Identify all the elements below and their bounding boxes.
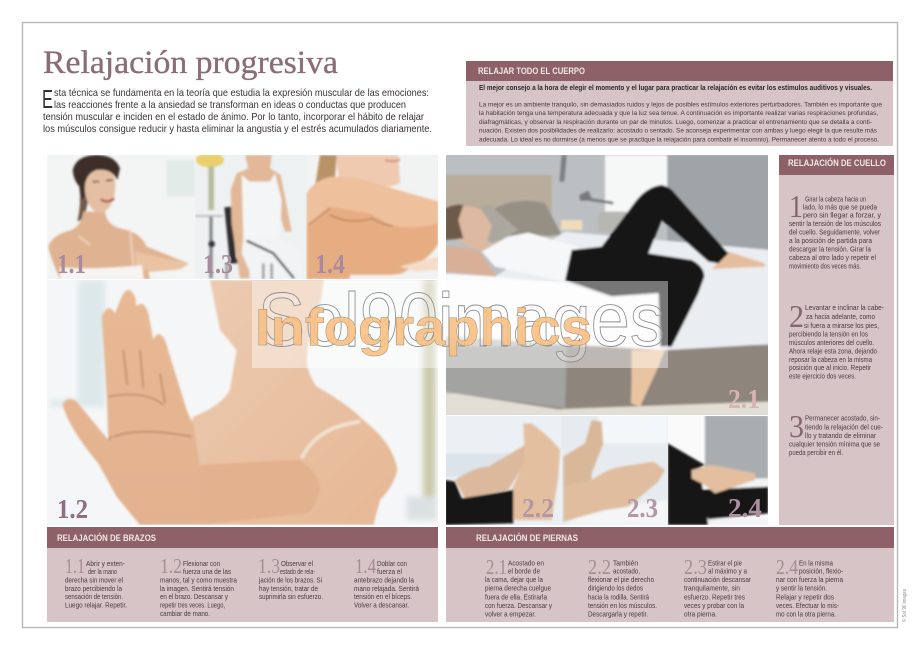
leg step 2.2 [588,555,657,618]
neck step 1: Girar la cabeza hacia un [805,194,866,204]
leg step 2.1: pierna derecha cuelgue [485,584,551,592]
arm step 1.1: 1.1 [65,554,85,578]
watermark: Sol90images [258,278,665,363]
arm step 1.4: Volver a descansar. [354,600,409,610]
leg step 2.3: esfuerzo. Repetir tres [684,592,745,602]
neck step 1: 1 [789,188,803,224]
leg step 2.1: 2.1 [486,555,507,579]
panel body text: la habitación tenga una temperatura adecuada y que la luz sea tenue. A continuación es importante realizar varias respiraciones profundas, [479,110,878,117]
arm step 1.4: tensión en el bíceps. [354,592,412,601]
leg step 2.4: Relajar y repetir dos [776,592,834,602]
photo number labels: 2.4 [728,493,762,523]
leg step 2.1: fuera de ella. Estirarla [485,592,547,602]
neck step 2: 2 [789,298,804,334]
neck step 2: músculos anteriores del cuello. [789,338,874,347]
neck step 1 [789,188,881,270]
neck step 3: 3 [789,408,804,444]
photo 2.3: relaxed foot [562,415,668,525]
arm step 1.1: brazo percibiendo la [65,584,122,593]
leg step 2.1: el borde de [508,566,540,576]
photo 2.2: flexed foot [445,416,562,525]
photo 2.4: foot and black legs [668,415,768,525]
leg step 2.2: dirigiendo los dedos [588,584,643,592]
leg step 2.3: otra pierna. [684,610,717,618]
neck step 2 [789,298,885,380]
leg step 2.2: flexionar el pie derecho [588,575,654,584]
photo 1.2: raised open hand [47,280,438,530]
leg step 2.2: También [613,558,638,568]
photo 2.1: woman lying on bed [445,155,770,420]
arm step 1.1 [65,554,127,610]
leg step 2.1: con fuerza. Descansar y [485,601,552,610]
leg step 2.4: posición, flexio- [799,566,844,576]
arm step 1.2: 1.2 [160,554,182,578]
panel: relajación de cuello [779,155,894,525]
intro text block: sta técnica se fundamenta en la teoría que estudia la expresión muscular de las emociones: [54,88,429,99]
leg step 2.4: veces. Efectuar lo mis- [776,601,840,610]
neck step 1: descargar la tensión. Girar la [789,244,871,254]
heading: relajar todo el cuerpo: RELAJAR TODO EL CUERPO [478,66,585,76]
intro text block [42,84,432,135]
arm step 1.1: Abrir y exten- [86,559,126,568]
arm step 1.2: la imagen. Sentirá tensión [160,584,234,593]
photo credit: © Sol 90 Images [901,589,908,622]
arm step 1.3: estado de rela- [280,567,315,576]
leg step 2.2: tensión en los músculos. [588,601,657,610]
arm step 1.3: suprimirla sin esfuerzo. [259,592,323,601]
arm step 1.2: cambiar de mano. [160,609,210,618]
leg step 2.2: 2.2 [588,555,611,579]
neck step 2: Levantar e inclinar la cabe- [805,303,885,312]
heading: relajación de piernas: RELAJACIÓN DE PIERNAS [476,532,578,543]
arm step 1.2: repetir tres veces. Luego, [160,600,225,610]
panel lead sentence: El mejor consejo a la hora de elegir el momento y el lugar para practicar la relajación es evitar los estímulos auditivos y visuales. [479,85,872,92]
leg step 2.3: al máximo y a [708,566,747,576]
leg step 2.3: 2.3 [684,555,707,579]
neck step 3: llo y tratando de eliminar [805,431,877,440]
leg step 2.4: En la misma [799,558,833,568]
arm step 1.2: manos, tal y como muestra [160,576,237,584]
photo number labels: 1.2 [57,494,88,524]
panel body text: diafragmáticas, y observar la respiración durante un par de minutos. Luego, comenzar a practicar el entrenamiento que se detalla a conti- [479,119,872,126]
intro text block: las reacciones frente a la ansiedad se transforman en ideas o conductas que producen [54,100,406,111]
arm step 1.4: mano relajada. Sentirá [354,584,419,593]
photo 1.3: seated woman [195,153,306,279]
photo number labels [57,249,762,524]
panel body text: La mejor es un ambiente tranquilo, sin demasiados ruidos y lejos de posibles estímulos exteriores perturbadores. También es importante que [479,102,882,108]
neck step 1: pero sin llegar a forzar, y [803,210,881,220]
neck step 3: pueda percibir en él. [789,448,843,457]
heading: relajación de cuello: RELAJACIÓN DE CUELLO [788,157,886,168]
leg step 2.3: Estirar el pie [708,558,742,568]
arm step 1.1: Luego relajar. Repetir. [65,600,127,610]
arm step 1.2 [160,554,237,618]
intro text block: los músculos consigue reducir y hasta eliminar la angustia y el estrés acumulados diariamente. [43,124,432,135]
leg step 2.1: volver a empezar. [485,610,536,618]
panel: relajación de piernas [446,527,894,622]
leg step 2.3: veces y probar con la [684,601,744,610]
neck step 2: Ahora relaje esta zona, dejando [789,346,877,356]
leg step 2.1: Acostado en [508,558,544,568]
neck step 2: percibiendo la tensión en los [789,330,868,338]
leg step 2.4: mo con la otra pierna. [776,610,836,618]
neck step 3: cualquier tensión mínima que se [789,440,880,448]
panel body text: adecuada. Lo ideal es no dormirse (a menos que se practique la relajación para combatir el insomnio). Permanecer atento a todo el proceso. [479,136,879,144]
photo 1.4: folded arm [306,155,438,279]
photo 1.1: woman with arm extended [47,155,195,279]
arm step 1.1: sensación de tensión. [65,592,123,601]
arm step 1.4: Doblar con [377,559,407,568]
intro text block: E [42,84,53,114]
arm step 1.3: Observar el [281,559,313,568]
heading: relajación de brazos: RELAJACIÓN DE BRAZOS [57,532,156,543]
neck step 2: este ejercicio dos veces. [789,372,856,380]
arm step 1.2: en el brazo. Descansar y [160,592,228,601]
photo number labels: 2.3 [627,493,658,523]
arm step 1.4: antebrazo dejando la [354,576,414,584]
neck step 2: za hacia adelante, como [806,312,875,321]
arm step 1.3 [258,554,323,601]
leg step 2.4: 2.4 [776,555,798,579]
neck step 1: movimiento dos veces más. [789,262,861,270]
neck step 1: a la posición de partida para [789,236,872,245]
neck step 3: Permanecer acostado, sin- [805,414,881,422]
panel body text: nuación. Existen dos posibilidades de realizarlo: acostado o sentado. Se aconseja experimentar con ambas y luego elegir la que resulte más [479,128,878,134]
watermark: Infographics [255,299,592,357]
leg step 2.4 [776,555,844,618]
photo number labels: 1.1 [57,249,86,279]
arm step 1.1: der la mano [88,567,117,576]
panel body text [479,102,882,144]
neck step 3: tiendo la relajación del cue- [805,422,884,432]
arm step 1.4: 1.4 [355,554,376,578]
arm step 1.4 [354,554,419,610]
leg step 2.3 [684,555,752,618]
neck step 3 [789,408,884,457]
neck step 2: posición que al inicio. Repetir [789,363,872,372]
leg step 2.1: la cama, dejar que la [485,575,543,584]
panel: relajación de brazos [47,527,438,622]
leg step 2.4: y sentir la tensión. [776,584,827,592]
neck step 2: si fuera a mirarse los pies, [804,321,879,330]
arm step 1.1: derecha sin mover el [65,576,123,584]
photo number labels: 2.1 [728,384,760,414]
arm step 1.3: hay tensión, tratar de [259,584,318,593]
neck step 1: lado, lo más que se pueda [803,202,877,212]
panel: relajar todo el cuerpo [466,61,893,146]
photo number labels: 1.3 [203,249,233,279]
leg step 2.2: hacia la rodilla. Sentirá [588,592,649,602]
arm step 1.4: fuerza el [377,567,402,576]
leg step 2.3: continuación descansar [684,575,752,584]
arm step 1.3: jación de los brazos. Si [258,576,322,584]
leg step 2.2: acostado, [613,566,640,576]
neck step 1: del cuello. Seguidamente, volver [789,228,881,236]
leg step 2.2: Descargarla y repetir. [588,610,648,618]
neck step 1: sentir la tensión de los músculos [789,219,881,228]
arm step 1.2: Flexionar con [183,559,220,568]
intro text block: tensión muscular e inciden en el estado de ánimo. Por lo tanto, incorporar el hábito de relajar [43,112,424,123]
photo number labels: 2.2 [522,493,554,523]
neck step 1: cabeza al otro lado y repetir el [789,253,876,262]
leg step 2.3: tranquilamente, sin [684,584,740,592]
photo number labels: 1.4 [315,249,345,279]
neck step 2: reposar la cabeza en la misma [789,355,872,364]
arm step 1.2: fuerza una de las [183,567,231,576]
arm step 1.3: 1.3 [258,554,280,578]
title: Relajación progresiva [43,45,338,81]
leg step 2.4: nar con fuerza la pierna [776,575,843,584]
leg step 2.1 [485,555,552,618]
